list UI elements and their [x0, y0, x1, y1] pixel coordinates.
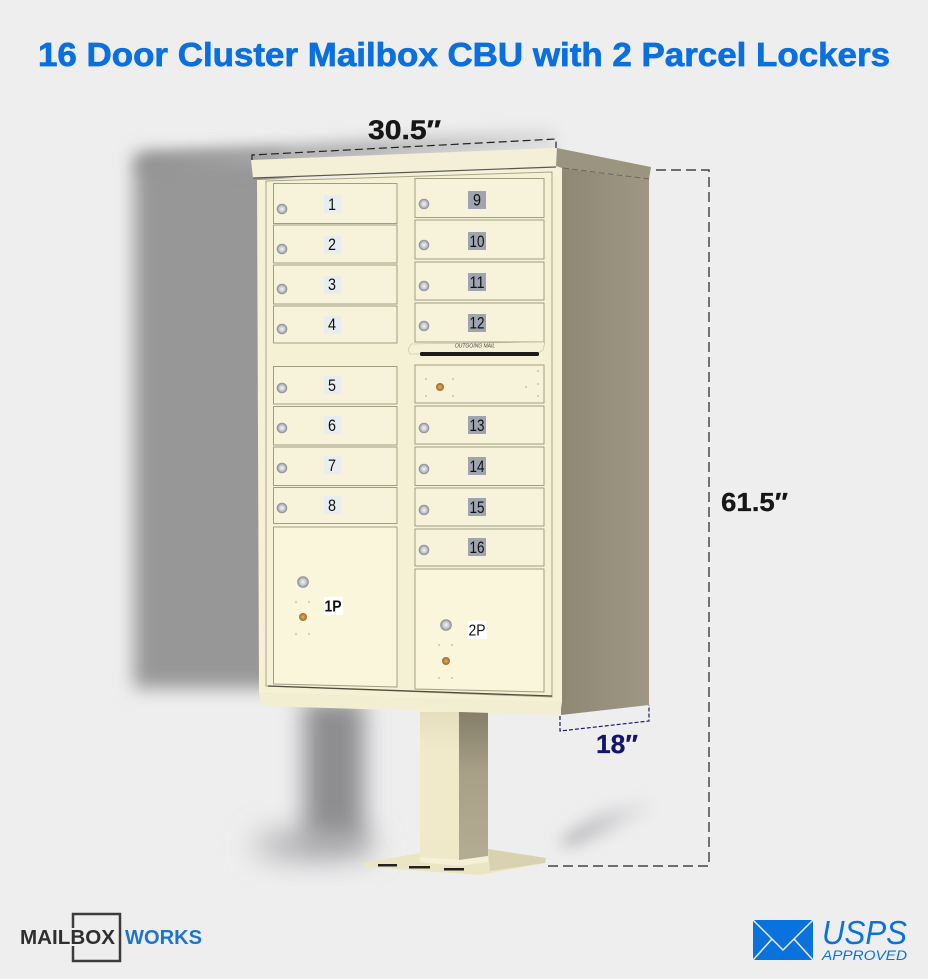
door numbers: 11: [470, 274, 484, 292]
roof front: [251, 148, 556, 178]
logo: USPS Approved: USPS: [822, 914, 907, 951]
height dimension: 61.5 inches: [544, 170, 788, 866]
door numbers: 13: [470, 417, 484, 435]
parcel locker 2P door: [415, 569, 544, 692]
door numbers: 15: [470, 499, 484, 517]
key locks: [277, 199, 452, 630]
parcel labels: [324, 597, 487, 640]
door numbers: 5: [328, 377, 336, 395]
left column doors: [274, 184, 397, 524]
base strip: [259, 693, 562, 715]
icon: envelope: [753, 920, 813, 960]
logo: Mailbox Works: MAILBOX: [20, 927, 116, 949]
door numbers: 4: [328, 316, 336, 334]
cabinet front: [257, 168, 562, 702]
mailbox unit: [251, 148, 651, 875]
door numbers: 8: [328, 497, 336, 515]
door numbers: 9: [473, 192, 481, 210]
wall shadows: [134, 130, 655, 859]
parcel labels: 1P: [324, 598, 342, 616]
door numbers: 14: [470, 458, 484, 476]
outgoing mail slot: OUTGOING MAIL: [455, 344, 495, 350]
door numbers: 2: [328, 236, 336, 254]
logo: USPS Approved: [753, 914, 907, 963]
door numbers: 1: [328, 196, 336, 214]
door numbers: 16: [470, 539, 484, 557]
rivets: [295, 370, 539, 679]
door number plates right: [468, 191, 486, 556]
pedestal post: [362, 712, 546, 875]
height dimension: 61.5 inches: 61.5″: [721, 487, 788, 517]
right column doors: [415, 178, 544, 566]
roof side: [556, 148, 651, 179]
depth dimension: 18 inches: [560, 705, 649, 759]
width dimension: 30.5 inches: 30.5″: [368, 115, 441, 145]
door number plates left: [324, 195, 341, 514]
outgoing mail slot: [408, 342, 545, 356]
parcel labels: 2P: [468, 622, 486, 640]
logo: Mailbox Works: [20, 914, 202, 961]
door numbers: 6: [328, 417, 336, 435]
door numbers: 12: [470, 314, 484, 332]
logo: Mailbox Works: WORKS: [125, 927, 202, 949]
cabinet side: [561, 168, 649, 715]
logo: USPS Approved: APPROVED: [821, 947, 907, 963]
door numbers: [328, 192, 484, 557]
door numbers: 10: [470, 233, 484, 251]
depth dimension: 18 inches: 18″: [596, 729, 638, 759]
width dimension: 30.5 inches: [252, 115, 556, 160]
inner door frame: [266, 172, 552, 697]
door numbers: 7: [328, 457, 336, 475]
title: 16 Door Cluster Mailbox CBU with 2 Parcel Lockers: [38, 36, 890, 73]
parcel locker 1P door: [274, 527, 397, 687]
brass locks: [299, 383, 450, 665]
door numbers: 3: [328, 276, 336, 294]
